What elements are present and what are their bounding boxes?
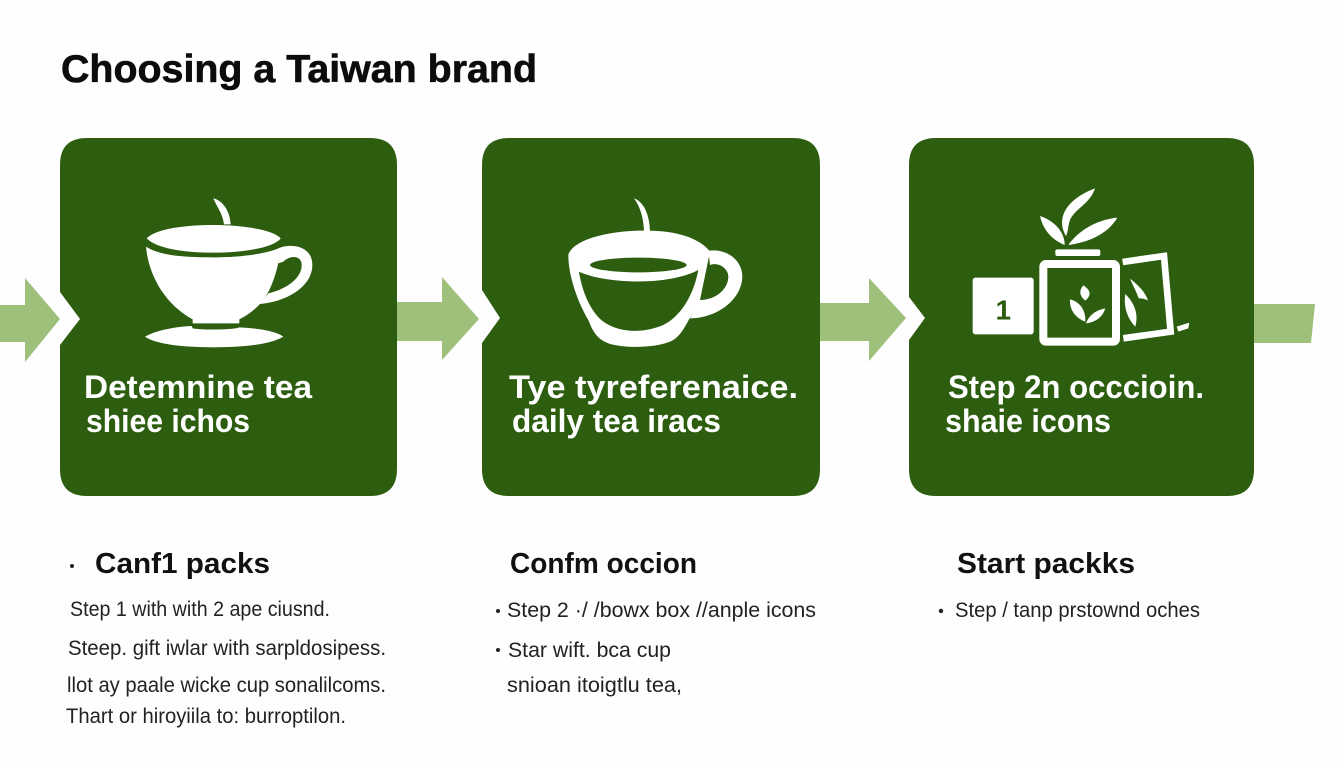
panel label: step 3: shaie icons bbox=[945, 403, 1111, 439]
text block: column 2: snioan itoigtlu tea, bbox=[507, 673, 682, 697]
text block: column 1: llot ay paale wicke cup sonalilcoms. bbox=[67, 673, 386, 697]
text block: column 1: Canf1 packs bbox=[95, 548, 270, 580]
arrow: entry bbox=[0, 278, 60, 362]
text block: column 3: Start packks bbox=[957, 548, 1135, 580]
arrow: step 2 to step 3 bbox=[820, 278, 906, 361]
text block: column 1 bbox=[66, 548, 386, 728]
panel label: step 1: shiee ichos bbox=[86, 403, 250, 439]
icon: tea cup with tea bbox=[568, 198, 742, 347]
panel label: step 3 bbox=[945, 369, 1204, 439]
panel label: step 2: daily tea iracs bbox=[512, 403, 721, 439]
panel label: step 1 bbox=[84, 369, 312, 439]
panel: step 2 bbox=[482, 138, 820, 496]
panel label: step 2 bbox=[509, 369, 798, 439]
text block: column 2 bbox=[496, 548, 816, 697]
arrow: exit bbox=[1254, 304, 1315, 343]
panel: step 3 bbox=[909, 138, 1254, 496]
icon: numbered card, tea jar and pack: 1 bbox=[996, 294, 1011, 325]
text block: column 3 bbox=[939, 548, 1200, 622]
text block: column 1: Thart or hiroyiila to: burroptilon. bbox=[66, 704, 346, 728]
text block: column 3: Step / tanp prstownd oches bbox=[955, 598, 1200, 622]
panel label: step 1: Detemnine tea bbox=[84, 369, 312, 405]
panel: step 1 bbox=[60, 138, 397, 496]
text block: column 2: Star wift. bca cup bbox=[508, 638, 671, 662]
icon: tea cup with saucer bbox=[145, 198, 312, 347]
arrow: step 1 to step 2 bbox=[397, 277, 479, 360]
icon: numbered card, tea jar and pack bbox=[973, 188, 1189, 342]
panel label: step 2: Tye tyreferenaice. bbox=[509, 369, 798, 405]
panel label: step 3: Step 2n occcioin. bbox=[948, 369, 1204, 405]
text block: column 2: Confm occion bbox=[510, 548, 697, 580]
title: Choosing a Taiwan brand bbox=[61, 48, 537, 91]
text block: column 1: Steep. gift iwlar with sarpldosipess. bbox=[68, 636, 386, 660]
text block: column 2: Step 2 ·/ /bowx box //anple icons bbox=[507, 598, 816, 622]
text block: column 1: Step 1 with with 2 ape ciusnd. bbox=[70, 597, 330, 621]
